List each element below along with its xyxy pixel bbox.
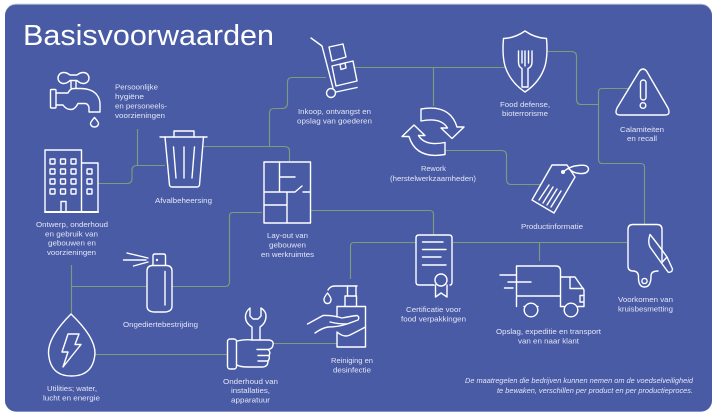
icon: price tag bbox=[532, 165, 588, 213]
label: buildings: Ontwerp, onderhoud bbox=[36, 220, 108, 229]
icon: certificate bbox=[416, 235, 452, 297]
icon: shield with fork bbox=[503, 31, 547, 92]
label: pest control: Ongediertebestrijding bbox=[123, 320, 198, 329]
label: cross-contamination bbox=[618, 295, 673, 314]
icon: warning triangle bbox=[616, 69, 669, 115]
icon: soap dispenser and hand bbox=[308, 286, 366, 347]
icon: recycle arrows bbox=[402, 108, 464, 155]
label: buildings: gebouwen en bbox=[48, 238, 96, 248]
station: food defense bbox=[500, 31, 550, 118]
station: product information bbox=[521, 165, 588, 231]
label: buildings bbox=[36, 220, 108, 257]
station: rework bbox=[390, 108, 476, 183]
icon: delivery truck bbox=[500, 266, 584, 317]
label: transport: Opslag, expeditie en transport bbox=[496, 327, 601, 336]
footnote: De maatregelen die bedrijven kunnen nemen om de voedselveiligheid bbox=[465, 378, 694, 385]
label: maintenance: apparatuur bbox=[231, 396, 271, 404]
label: cleaning: Reiniging en bbox=[331, 356, 373, 365]
station: personal hygiene bbox=[50, 72, 168, 127]
station: cross-contamination bbox=[618, 224, 673, 314]
station: utilities bbox=[43, 314, 100, 402]
label: maintenance: Onderhoud van bbox=[223, 377, 278, 386]
label: buildings: voorzieningen bbox=[47, 248, 96, 257]
label: maintenance bbox=[223, 377, 278, 404]
label: transport bbox=[496, 327, 601, 346]
title: Basisvoorwaarden bbox=[23, 20, 274, 52]
station: buildings bbox=[36, 150, 108, 257]
label: food defense bbox=[500, 100, 550, 118]
footnote bbox=[465, 378, 694, 395]
footnote: te bewaken, verschillen per product en per productieproces. bbox=[497, 388, 693, 395]
station: waste management bbox=[155, 131, 212, 205]
label: layout bbox=[261, 231, 314, 259]
label: calamities: en recall bbox=[627, 134, 657, 143]
station: certification bbox=[401, 235, 466, 324]
label: product information: Productinformatie bbox=[521, 222, 583, 231]
label: rework: Rework bbox=[421, 164, 446, 173]
label: layout: gebouwen bbox=[269, 240, 306, 250]
label: personal hygiene: Persoonlijke bbox=[115, 82, 158, 92]
label: food defense: bioterrorisme bbox=[502, 109, 548, 118]
label: utilities: lucht en energie bbox=[43, 394, 100, 402]
station: calamities bbox=[616, 69, 669, 143]
label: utilities bbox=[43, 384, 100, 402]
label: utilities: Utilities; water, bbox=[47, 384, 97, 393]
label: certification: Certificatie voor bbox=[406, 305, 462, 314]
label: calamities bbox=[620, 125, 664, 143]
icon: floor plan bbox=[264, 162, 310, 223]
station: purchasing bbox=[297, 38, 372, 126]
connector lines bbox=[72, 52, 644, 354]
icon: water tap bbox=[50, 72, 100, 127]
label: rework: (herstelwerkzaamheden) bbox=[390, 174, 476, 183]
station: transport bbox=[496, 266, 601, 346]
label: transport: van en naar klant bbox=[518, 336, 579, 346]
label: layout: Lay-out van bbox=[267, 231, 308, 240]
label: certification: food verpakkingen bbox=[401, 314, 466, 324]
icon: hand with wrench bbox=[228, 308, 273, 369]
label: personal hygiene bbox=[115, 82, 168, 120]
icon: building bbox=[45, 150, 98, 212]
station: cleaning bbox=[308, 286, 373, 374]
icon: spray can bbox=[124, 253, 172, 312]
label: waste management: Afvalbeheersing bbox=[155, 196, 212, 205]
label: purchasing: Inkoop, ontvangst en bbox=[298, 107, 371, 116]
station: layout bbox=[261, 162, 314, 259]
label: personal hygiene: voorzieningen bbox=[115, 111, 165, 120]
label: calamities: Calamiteiten bbox=[620, 125, 664, 134]
station: maintenance bbox=[223, 308, 278, 404]
label: cleaning bbox=[331, 356, 373, 374]
label: buildings: en gebruik van bbox=[45, 230, 98, 238]
icon: drop with lightning bbox=[48, 314, 95, 376]
icon: trash bin bbox=[160, 131, 207, 187]
label: certification bbox=[401, 305, 466, 324]
label: cross-contamination: Voorkomen van bbox=[618, 295, 673, 304]
label: cross-contamination: kruisbesmetting bbox=[618, 304, 673, 314]
label: maintenance: installaties, bbox=[231, 386, 270, 395]
label: purchasing: opslag van goederen bbox=[297, 116, 372, 126]
label: rework bbox=[390, 164, 476, 183]
label: personal hygiene: hygiëne bbox=[115, 92, 144, 101]
label: personal hygiene: en personeels- bbox=[115, 102, 168, 110]
label: cleaning: desinfectie bbox=[333, 366, 371, 374]
station: pest control bbox=[123, 253, 198, 329]
label: food defense: Food defense, bbox=[500, 100, 550, 109]
label: purchasing bbox=[297, 107, 372, 126]
icon: hand truck bbox=[311, 38, 357, 98]
label: layout: en werkruimtes bbox=[261, 250, 314, 259]
icon: cutting board and knife bbox=[628, 224, 672, 287]
